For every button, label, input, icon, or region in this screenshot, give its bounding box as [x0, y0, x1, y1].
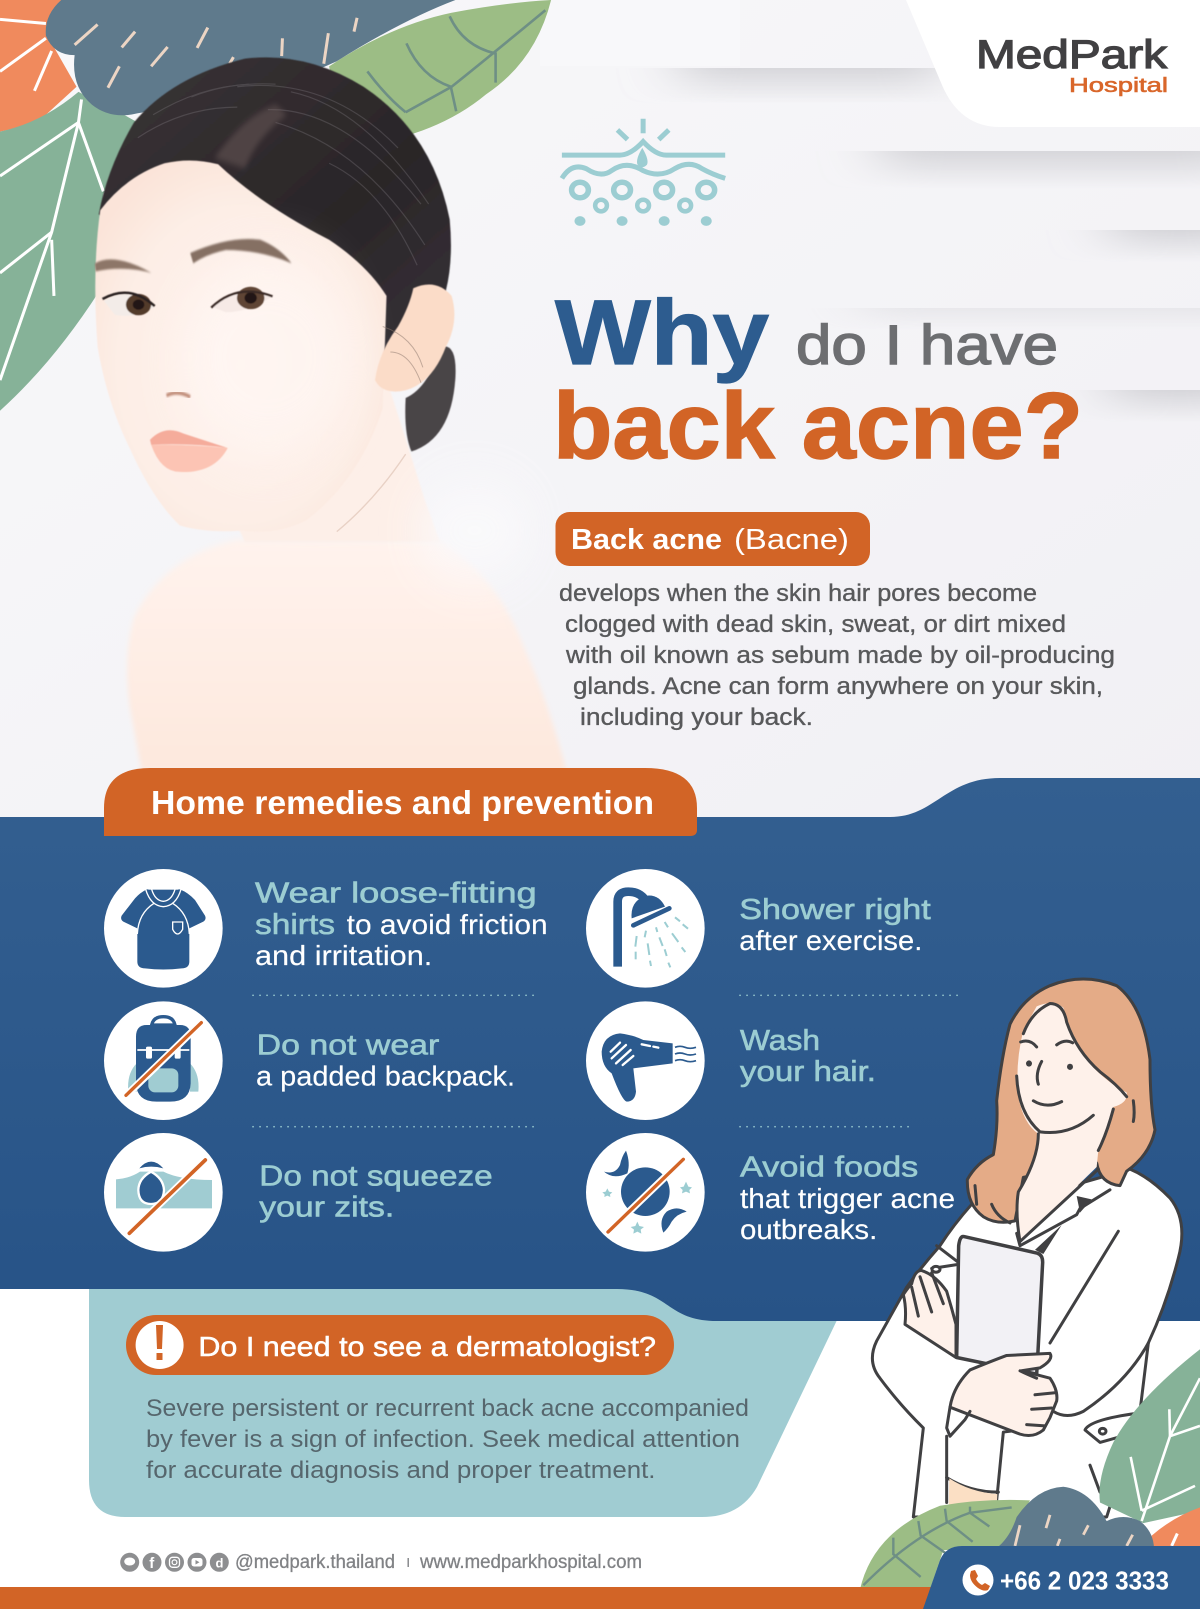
face lines — [975, 1003, 1134, 1242]
orange leaf — [1150, 1507, 1200, 1550]
dermatologist text: Severe persistent or recurrent back acne accompanied — [146, 1395, 749, 1422]
phone tab: +66 2 023 3333 — [1000, 1567, 1169, 1595]
remedy: loose shirts — [104, 869, 548, 988]
remedy: backpack — [104, 1001, 515, 1120]
dermatologist text — [146, 1395, 749, 1484]
neck glow — [417, 485, 532, 577]
icon: skin pores — [562, 119, 725, 226]
remedy: avoid foods: outbreaks. — [740, 1214, 877, 1245]
hair bun — [405, 346, 456, 452]
eyes — [1026, 1060, 1073, 1070]
background paper — [0, 0, 1200, 840]
title words do I have: do I have — [796, 313, 1058, 376]
lips — [150, 430, 228, 472]
face highlight — [180, 255, 356, 459]
definition text: develops when the skin hair pores become — [559, 580, 1037, 607]
logo panel — [906, 0, 1200, 127]
heading: do I need to see a dermatologist: Do I need to see a dermatologist? — [198, 1331, 656, 1362]
badge: back acne: (Bacne) — [734, 524, 849, 556]
green leaf — [0, 92, 138, 411]
hair — [99, 57, 451, 367]
remedy: backpack: Do not wear — [257, 1029, 440, 1061]
orange footer bar — [0, 1587, 935, 1609]
icon: hair dryer — [586, 1001, 705, 1120]
remedy: wash hair: your hair. — [740, 1056, 876, 1088]
neck — [230, 367, 440, 542]
remedy: avoid foods: Avoid foods — [740, 1152, 918, 1184]
definition text — [559, 580, 1115, 731]
icons: social media: d — [216, 1556, 224, 1570]
icon: crossed backpack — [104, 1001, 223, 1120]
dermatologist text: for accurate diagnosis and proper treatment. — [146, 1457, 656, 1484]
eyebrow left — [95, 259, 152, 273]
logo wordmark MedPark: MedPark — [976, 33, 1168, 77]
wisps of hair on ear — [383, 327, 423, 383]
nose — [166, 393, 190, 397]
slate cloud leaf — [46, 0, 455, 115]
heading: home remedies and prevention: Home remedies and prevention — [151, 784, 654, 821]
white lower background — [0, 1280, 1200, 1609]
title — [553, 282, 1083, 478]
eyebrow right — [190, 239, 292, 263]
remedy: zits: your zits. — [259, 1192, 394, 1224]
badge: back acne — [556, 512, 870, 566]
orange leaf — [0, 0, 77, 132]
tablet — [957, 1236, 1043, 1374]
remedy: wash hair: Wash — [740, 1025, 820, 1057]
remedy: loose shirts: and irritation. — [255, 940, 432, 971]
remedy: shower: Shower right — [739, 894, 931, 926]
tan undershirt — [949, 1478, 997, 1507]
remedy: zits — [104, 1133, 493, 1252]
neck crease — [337, 454, 406, 532]
light green leaf — [860, 1500, 1030, 1589]
portrait photo of woman — [95, 57, 566, 770]
remedy: shower: after exercise. — [739, 925, 922, 956]
icon: exclamation — [136, 1321, 184, 1369]
badge: back acne: Back acne — [571, 524, 722, 556]
definition text: clogged with dead skin, sweat, or dirt mixed — [565, 611, 1066, 638]
illustrated doctor — [872, 979, 1182, 1517]
icon: shower — [586, 869, 705, 988]
logo wordmark Hospital: Hospital — [1069, 75, 1168, 97]
neck and face — [1017, 1003, 1127, 1242]
icon: t-shirt — [104, 869, 223, 988]
heading: do I need to see a dermatologist — [126, 1315, 674, 1375]
slate cloud leaf — [997, 1487, 1154, 1548]
parting highlight — [214, 105, 287, 168]
hair — [967, 979, 1155, 1222]
coat pocket — [1085, 1413, 1137, 1442]
remedy: shower — [586, 869, 931, 988]
social media footer — [120, 1552, 642, 1573]
title word Why: Why — [555, 282, 769, 384]
icon: phone — [962, 1564, 994, 1596]
upper hand — [903, 1271, 956, 1358]
definition text: with oil known as sebum made by oil-producing — [565, 642, 1115, 669]
remedy: loose shirts: to avoid friction — [347, 909, 548, 940]
eye right — [211, 287, 272, 312]
dermatologist text: by fever is a sign of infection. Seek medical attention — [146, 1426, 740, 1453]
ear — [375, 285, 454, 392]
icon: crossed pimple — [104, 1133, 223, 1252]
definition text: including your back. — [580, 704, 813, 731]
lab coat — [872, 1169, 1182, 1517]
remedy: loose shirts: Wear loose-fitting — [255, 878, 537, 910]
face — [95, 160, 387, 532]
coat collar — [947, 1169, 1148, 1502]
blue band: home remedies — [0, 778, 1200, 1321]
bottom-right leaves — [860, 1349, 1200, 1589]
pen — [932, 1264, 958, 1268]
phone tab — [923, 1546, 1200, 1609]
teal panel: see a dermatologist — [89, 1285, 838, 1517]
top-left leaves — [0, 0, 551, 411]
green leaf — [1099, 1349, 1200, 1523]
remedy: backpack: a padded backpack. — [256, 1061, 515, 1092]
icon: crossed candy — [586, 1133, 705, 1252]
shoulder and back — [127, 540, 566, 770]
dotted dividers — [253, 995, 958, 1127]
icons: social media — [120, 1553, 229, 1572]
remedy: loose shirts: shirts — [255, 909, 335, 941]
title words back acne: back acne? — [553, 373, 1083, 478]
remedy: zits: Do not squeeze — [259, 1161, 493, 1193]
definition text: glands. Acne can form anywhere on your skin, — [573, 673, 1103, 700]
social media footer: @medpark.thailand — [235, 1552, 395, 1573]
social media footer: www.medparkhospital.com — [419, 1552, 642, 1573]
heading: home remedies and prevention — [104, 768, 697, 836]
remedy: wash hair — [586, 1001, 876, 1120]
eye left — [103, 293, 155, 316]
icons: social media: f — [149, 1555, 155, 1572]
remedy: avoid foods — [586, 1133, 955, 1252]
inner shirt — [1035, 1196, 1092, 1254]
lower hand — [950, 1353, 1057, 1436]
remedy: avoid foods: that trigger acne — [740, 1183, 955, 1214]
light green leaf — [329, 0, 551, 153]
